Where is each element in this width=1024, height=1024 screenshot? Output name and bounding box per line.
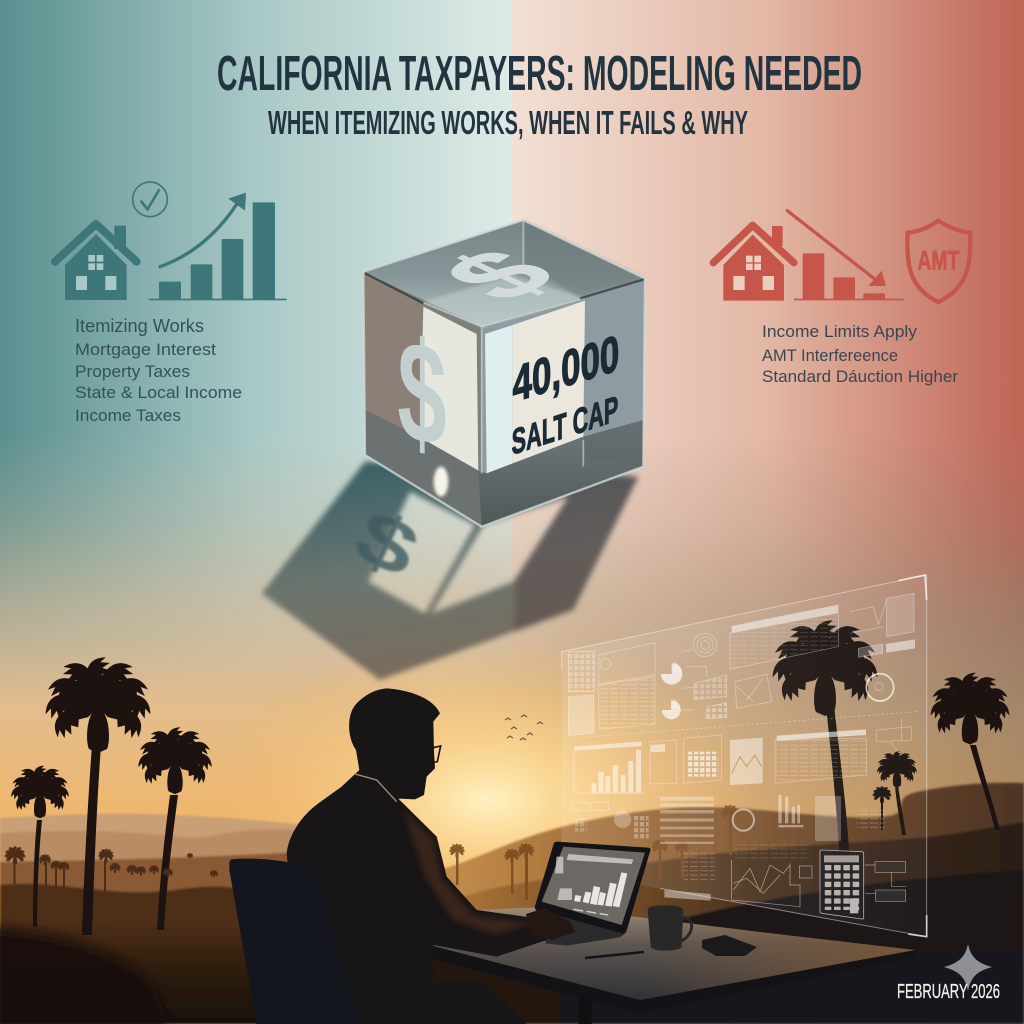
collar	[355, 774, 397, 802]
value: 40,000: 40,000	[513, 324, 619, 413]
text block: itemizing works: Itemizing Works	[75, 316, 204, 336]
text block: itemizing works: Property Taxes	[75, 362, 190, 381]
palm: large right	[772, 619, 878, 862]
panel: itemizing fails icons	[713, 211, 970, 302]
cube lower band	[365, 410, 643, 527]
text block: itemizing fails: Standard Dáuction Higher	[762, 367, 958, 386]
icon: AMT shield	[907, 221, 970, 302]
cube shadow	[262, 462, 638, 680]
palm trees: distant left group	[4, 846, 218, 892]
dotted divider	[570, 712, 917, 738]
text block: itemizing works: State & Local Income	[75, 383, 242, 402]
coffee mug	[648, 905, 692, 951]
pie charts	[661, 662, 682, 719]
cube edge highlights	[423, 220, 583, 473]
icon: house	[55, 224, 137, 300]
text block: itemizing works: Mortgage Interest	[75, 340, 216, 359]
cube shadow: $	[343, 493, 431, 594]
dashboard row 2 cards	[574, 718, 912, 793]
bar chart	[574, 741, 643, 794]
icon: rising bar chart	[149, 193, 287, 300]
label: SALT CAP: SALT CAP	[512, 388, 618, 463]
laptop bars	[574, 872, 627, 907]
cube top face	[363, 220, 645, 327]
palm trees: distant center	[449, 804, 739, 900]
dollar sign: cube top: $	[415, 236, 583, 314]
palm: far right	[931, 672, 1009, 830]
palm: medium left	[138, 726, 212, 930]
background: teal and coral split panels	[0, 0, 1024, 700]
dashboard row 3: lists, dials and charts	[572, 795, 885, 901]
icon: house	[713, 225, 794, 301]
sparkle	[944, 944, 992, 991]
landscape: hills and ground	[0, 783, 1024, 1024]
glass cube: 40,000 SALT CAP	[363, 220, 645, 527]
panel glass	[562, 575, 927, 937]
man silhouette	[287, 688, 575, 1024]
icon: AMT shield: AMT	[917, 245, 959, 275]
jacket rim light	[403, 810, 545, 935]
hand	[526, 908, 575, 940]
chair	[229, 859, 360, 1024]
cube lit inner faces	[420, 301, 585, 473]
line chart	[732, 860, 812, 907]
text block: itemizing fails: Income Limits Apply	[762, 322, 917, 341]
palm: large left	[45, 656, 151, 935]
palm: far left	[11, 765, 69, 927]
text block: itemizing works	[75, 316, 242, 425]
connector boxes	[865, 862, 906, 901]
area chart card	[730, 738, 763, 785]
icon: falling bar chart	[787, 211, 904, 300]
panel: itemizing works icons	[55, 182, 287, 300]
laptop	[535, 842, 651, 946]
palm trees	[11, 619, 1009, 935]
text block: itemizing works: Income Taxes	[75, 406, 181, 425]
glasses	[417, 740, 441, 763]
laptop screen	[542, 847, 645, 925]
text block: itemizing fails	[762, 322, 958, 386]
calculator	[820, 850, 864, 919]
birds	[505, 715, 543, 740]
desk	[423, 907, 915, 1024]
dashboard row 1: reports and pies	[568, 593, 914, 736]
icon: check circle	[133, 182, 167, 217]
dollar sign: cube left: $	[397, 308, 447, 479]
cube right face	[482, 278, 645, 527]
holographic dashboard panel	[562, 575, 927, 937]
palm: small right	[873, 751, 917, 835]
text block: itemizing fails: AMT Interfereence	[762, 346, 898, 365]
header bar	[732, 605, 838, 633]
pen	[585, 952, 644, 958]
cube left face	[363, 272, 482, 527]
phone	[702, 935, 757, 956]
